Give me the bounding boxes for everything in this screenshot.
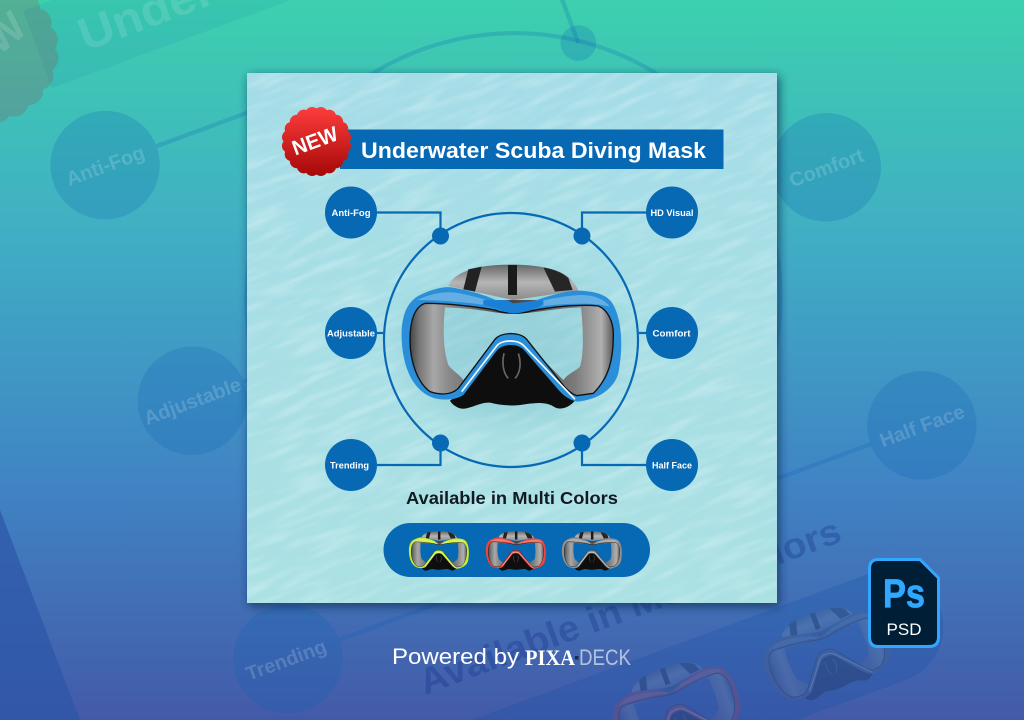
title: Underwater Scuba Diving Mask — [361, 138, 707, 163]
footer: Powered by PIXADECK: DECK — [579, 645, 631, 670]
watermark labels: Half Face — [877, 401, 968, 452]
badge: NEW: NEW — [289, 123, 341, 160]
icon: red mask — [486, 531, 546, 571]
icon: Photoshop PSD file: PSD — [887, 620, 921, 639]
icon: lime mask — [409, 531, 469, 571]
icon: main blue diving mask — [402, 265, 621, 409]
feature: Half Face: Half Face — [652, 460, 692, 471]
connector nodes — [432, 228, 590, 452]
watermark labels: Trending — [243, 636, 330, 685]
watermark labels: Adjustable — [141, 374, 244, 430]
diagram ring and connectors — [377, 212, 646, 467]
watermark labels: Comfort — [787, 145, 867, 192]
footer: Powered by PIXADECK: PIXA — [525, 645, 575, 670]
icon: grey mask — [562, 531, 622, 571]
feature: Anti-Fog: Anti-Fog — [332, 208, 371, 219]
feature: Adjustable — [325, 307, 377, 359]
feature: Trending — [325, 439, 377, 491]
icon: Photoshop PSD file — [870, 560, 938, 646]
feature: Half Face — [646, 439, 698, 491]
card background — [247, 73, 777, 603]
watermark labels: Anti-Fog — [63, 142, 148, 191]
panel: product card — [242, 68, 786, 612]
badge: NEW — [282, 107, 351, 176]
watermark subheading: Available in Multi Colors — [413, 510, 846, 702]
darker wedge of enlarged card edge — [0, 510, 80, 720]
footer: Powered by PIXADECK — [392, 644, 631, 670]
feature: Comfort — [646, 307, 698, 359]
feature: Trending: Trending — [330, 460, 369, 471]
title banner — [340, 130, 724, 169]
watermark pill — [393, 555, 959, 720]
feature: Comfort: Comfort — [652, 328, 691, 339]
subheading: Available in Multi Colors — [406, 488, 618, 508]
feature: Anti-Fog — [325, 186, 377, 238]
feature: Adjustable: Adjustable — [327, 328, 375, 339]
watermark badge — [0, 0, 79, 144]
watermark connector lines — [156, 0, 872, 644]
feature: HD Visual: HD Visual — [650, 208, 694, 219]
footer: Powered by PIXADECK: Powered by — [392, 644, 519, 669]
watermark mini masks — [602, 591, 899, 720]
sand ripple texture — [247, 73, 777, 603]
feature: HD Visual — [646, 186, 698, 238]
icon: Photoshop PSD file: Ps — [883, 572, 925, 616]
watermark banner — [23, 0, 808, 88]
colour options pill — [384, 523, 650, 577]
